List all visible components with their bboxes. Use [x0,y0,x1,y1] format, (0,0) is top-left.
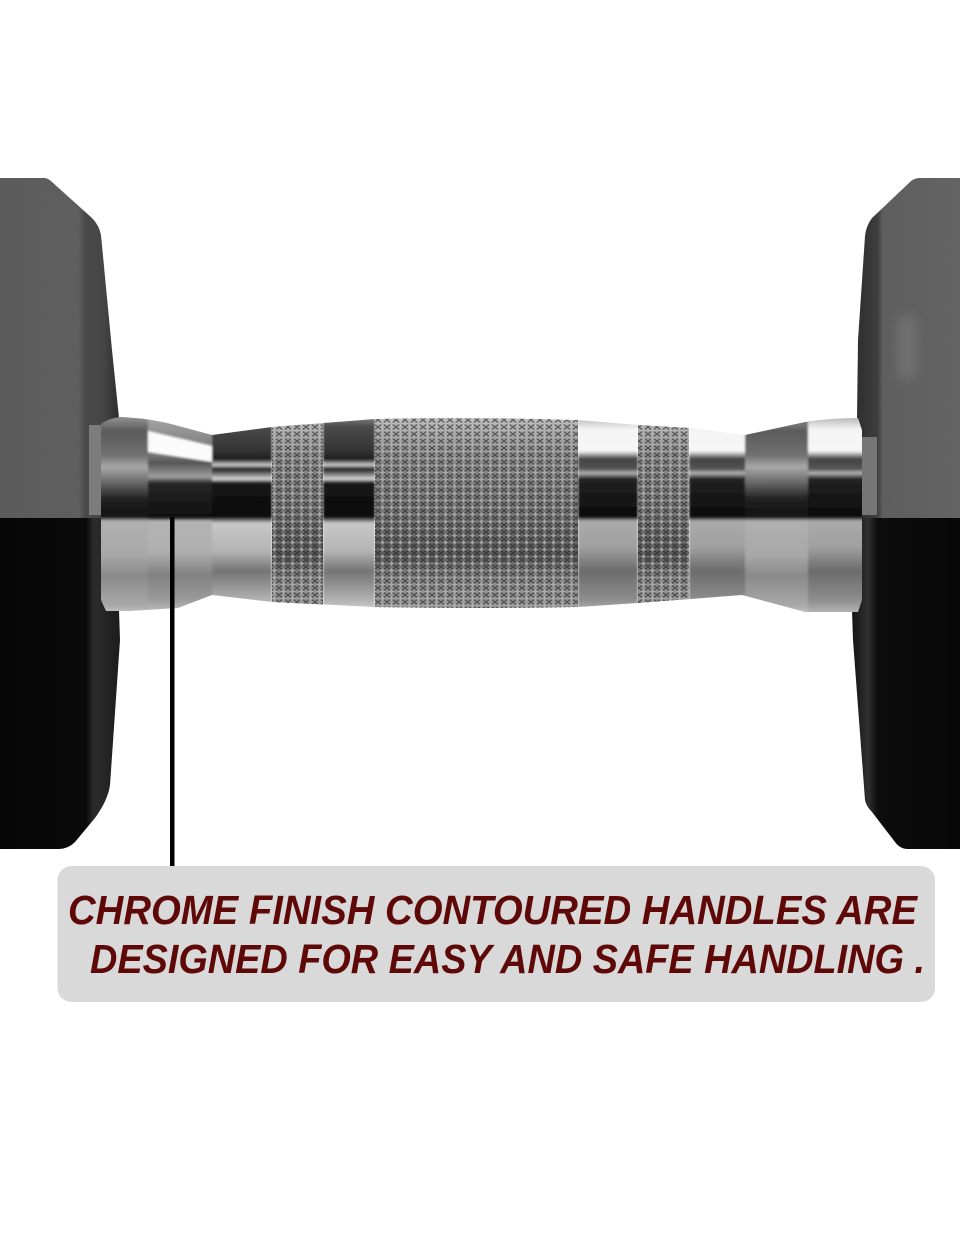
chrome handle [90,410,868,620]
right weight head [852,178,960,849]
callout [58,866,935,1002]
left head lower face [0,518,120,849]
knurled grip: right [638,420,689,610]
knurled grip: left [272,420,323,610]
right head upper face [857,178,960,518]
left head upper face [0,178,119,518]
smooth handle segments [90,410,868,620]
leader line [170,517,174,866]
right head moulded mark [898,315,916,380]
right head lower face [852,518,960,849]
callout background [58,866,935,1002]
left weight head [0,178,120,849]
left flange highlight [89,425,102,515]
right flange highlight [862,437,877,515]
knurled grip: centre [375,415,578,610]
callout text line 1: CHROME FINISH CONTOURED HANDLES ARE [68,887,919,933]
